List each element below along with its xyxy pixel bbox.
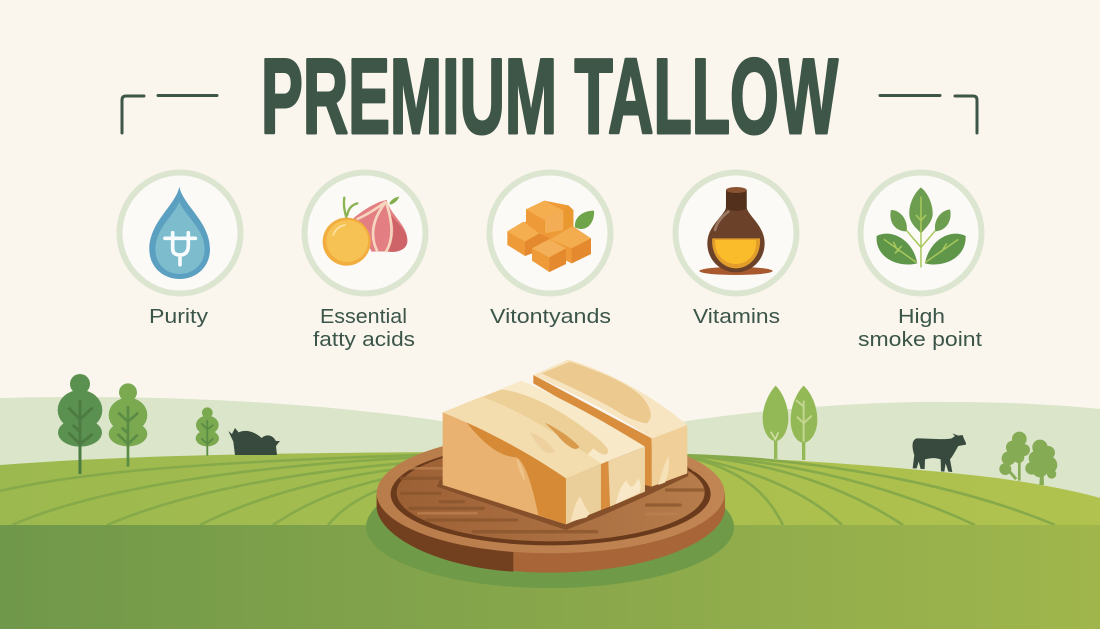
tallow block front <box>443 397 601 524</box>
icon: fruit and meat <box>323 197 407 266</box>
label: vitamins: Vitamins <box>693 306 780 328</box>
tree three <box>196 407 219 456</box>
bush one <box>999 432 1030 481</box>
animal silhouette <box>228 428 280 455</box>
label: essential fatty acids: fatty acids <box>313 329 415 351</box>
left title bracket <box>122 96 217 133</box>
label: vitontyands: Vitontyands <box>490 306 611 328</box>
bush two <box>1025 440 1057 485</box>
fatty acids ring <box>304 172 426 294</box>
smoke point ring <box>860 172 982 294</box>
left trees and animal <box>58 374 280 474</box>
poplar one <box>763 386 788 459</box>
cow <box>913 433 966 472</box>
feature: vitamins <box>676 172 796 328</box>
label: essential fatty acids: Essential <box>320 306 407 328</box>
label: essential fatty acids <box>313 306 415 351</box>
feature: essential fatty acids <box>304 172 426 351</box>
tallow block back <box>533 359 687 487</box>
icon: water drop <box>149 187 210 279</box>
feature: purity <box>120 172 240 328</box>
label: high smoke point <box>858 306 982 351</box>
icon: herb leaves <box>877 187 966 267</box>
board <box>377 433 725 573</box>
tree two <box>109 383 147 467</box>
label: high smoke point: High <box>898 306 945 328</box>
vitontyands ring <box>490 172 610 294</box>
right trees, cow and bushes <box>763 386 1057 485</box>
purity ring <box>120 172 240 294</box>
label: purity: Purity <box>149 306 208 328</box>
poplar two <box>791 386 817 460</box>
feature: vitontyands <box>490 172 611 328</box>
landscape <box>0 397 1100 629</box>
right title bracket <box>880 96 977 133</box>
label: high smoke point: smoke point <box>858 329 982 351</box>
tallow block middle <box>482 381 645 510</box>
vitamins ring <box>676 172 796 294</box>
feature: high smoke point <box>858 172 982 351</box>
tree one <box>58 374 102 474</box>
plate shadow <box>366 466 734 588</box>
icon: butter cubes <box>507 201 594 272</box>
wooden board and tallow <box>377 359 725 573</box>
icon: bottle <box>699 187 773 275</box>
